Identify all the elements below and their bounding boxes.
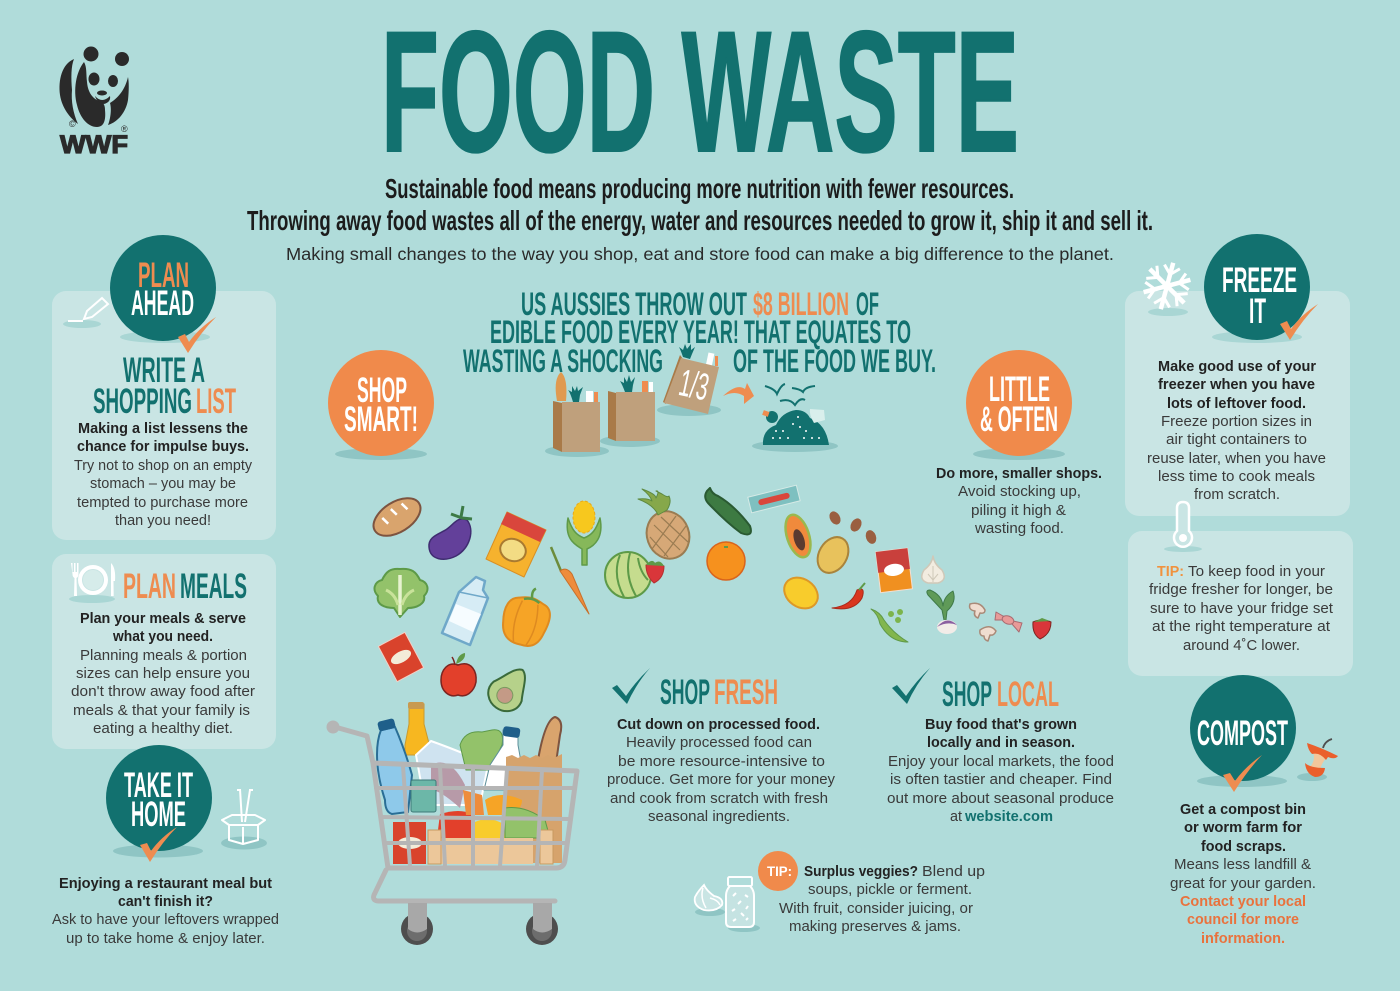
text: little and often <box>936 465 1102 537</box>
section: compost: information. <box>1201 930 1285 947</box>
section: shop local: Buy food that's grown <box>925 716 1077 733</box>
orange <box>707 542 745 580</box>
tip: surplus veggies: making preserves & jams. <box>789 918 961 935</box>
eggplant <box>429 506 472 559</box>
panel: plan ahead: AHEAD <box>131 284 194 323</box>
panel: plan ahead: Making a list lessens the <box>78 420 248 437</box>
panel: freeze it: Make good use of your <box>1158 358 1316 375</box>
badge: little and often <box>966 350 1072 460</box>
section: shop fresh: seasonal ingredients. <box>648 808 790 825</box>
bag 3: one third: 1/3 <box>675 362 712 409</box>
section: shop fresh: produce. Get more for your money <box>607 771 835 788</box>
section: shop local: out more about seasonal produce <box>887 790 1114 807</box>
section: take it home: can't finish it? <box>118 893 213 910</box>
section: shop local: LOCAL <box>997 675 1059 714</box>
text: little and often: wasting food. <box>974 520 1064 537</box>
potato <box>811 532 855 578</box>
panel: plan meals <box>52 554 276 749</box>
panel: freeze it: IT <box>1249 292 1266 331</box>
section: shop local: is often tastier and cheaper. Find <box>890 771 1112 788</box>
section: shop local <box>887 668 1114 825</box>
tip: surplus veggies: TIP: <box>767 864 792 879</box>
bag 2 <box>608 375 655 441</box>
section: shop fresh: and cook from scratch with fresh <box>610 790 828 807</box>
candy <box>995 612 1022 632</box>
cart contents <box>377 702 562 864</box>
tip: surplus veggies: With fruit, consider juicing, or <box>779 900 973 917</box>
panel: plan ahead: WRITE A <box>123 351 205 390</box>
callout: $8 billion: EDIBLE FOOD EVERY YEAR! THAT EQUATES TO <box>490 314 911 350</box>
icon: pencil <box>63 298 108 328</box>
section: shop local: website.com <box>964 808 1053 825</box>
panel: plan meals: what you need. <box>112 628 213 645</box>
bread <box>367 491 427 543</box>
section: shop fresh: be more resource-intensive to <box>618 753 825 770</box>
section: compost: Means less landfill & <box>1174 856 1311 873</box>
small strawberry <box>1033 618 1051 639</box>
carrot <box>551 547 589 614</box>
garlic <box>922 556 944 583</box>
landfill heap <box>762 384 829 445</box>
section: compost: COMPOST <box>1197 714 1288 753</box>
panel: plan ahead <box>52 235 276 540</box>
papaya <box>781 512 815 560</box>
callout: $8 billion <box>463 286 936 379</box>
chili <box>832 583 865 609</box>
panel: freeze it: lots of leftover food. <box>1167 395 1306 412</box>
panel: freeze it: freezer when you have <box>1158 376 1315 393</box>
tip: surplus veggies <box>695 851 985 935</box>
badge: little and often: & OFTEN <box>980 400 1058 439</box>
panel: freeze it: reuse later, when you have <box>1147 450 1326 467</box>
panel: fridge tip: To keep food in your <box>1188 563 1325 580</box>
wheels <box>401 903 558 945</box>
mushrooms <box>970 603 996 641</box>
subtitle text: Making small changes to the way you shop, eat and store food can make a big difference to the planet. <box>286 244 1114 264</box>
badge: shop smart: SHOP <box>357 371 407 410</box>
panel: plan ahead: tempted to purchase more <box>77 494 248 511</box>
panel: plan ahead: SHOPPING <box>93 382 192 421</box>
section: shop local: at <box>950 808 963 825</box>
illustration: grocery bags to landfill <box>545 344 838 457</box>
subtitle text: Sustainable food means producing more nutrition with fewer resources. <box>385 173 1014 204</box>
icon: teal check <box>892 668 930 704</box>
icon: thermometer <box>1164 502 1202 552</box>
strawberry <box>646 561 664 583</box>
avocado <box>482 660 537 718</box>
panel: freeze it: from scratch. <box>1194 486 1280 503</box>
icon: teal check <box>612 668 650 704</box>
bag 3: one third <box>663 344 719 414</box>
section: take it home: Ask to have your leftovers wrapped <box>52 911 279 928</box>
text: little and often: Do more, smaller shops. <box>936 465 1102 482</box>
cabbage <box>605 552 651 598</box>
red package <box>378 632 424 682</box>
section: compost: council for more <box>1187 911 1299 928</box>
callout: $8 billion: WASTING A SHOCKING <box>463 343 663 379</box>
panel: freeze it: air tight containers to <box>1166 431 1307 448</box>
panel: plan meals: eating a healthy diet. <box>93 720 233 737</box>
section: compost: or worm farm for <box>1184 819 1302 836</box>
icon: takeaway box with chopsticks <box>221 789 267 850</box>
icon: garlic and jar <box>695 877 760 932</box>
panel: plan meals: don't throw away food after <box>71 683 255 700</box>
subtitle text <box>247 173 1153 264</box>
arrow <box>723 383 754 404</box>
callout: $8 billion: US AUSSIES THROW OUT <box>521 286 747 322</box>
section: shop fresh <box>607 668 835 825</box>
section: compost: Contact your local <box>1180 893 1306 910</box>
panel: freeze it <box>1125 234 1350 516</box>
tip: surplus veggies: soups, pickle or ferment. <box>808 881 972 898</box>
panel: plan meals: Planning meals & portion <box>80 647 247 664</box>
milk carton <box>442 577 488 645</box>
panel: plan ahead: LIST <box>196 382 236 421</box>
logo: WWF panda: © <box>69 119 76 129</box>
section: shop fresh: Heavily processed food can <box>626 734 812 751</box>
panel: plan meals: sizes can help ensure you <box>76 665 250 682</box>
callout: $8 billion: $8 BILLION <box>753 286 849 322</box>
panel: fridge tip: sure to have your fridge set <box>1150 600 1334 617</box>
snack bar <box>748 485 800 513</box>
yellow pepper <box>497 582 556 650</box>
panel: fridge tip: fridge fresher for longer, be <box>1149 581 1333 598</box>
panel: fridge tip <box>1128 502 1353 676</box>
cucumber <box>705 488 751 534</box>
lettuce <box>375 569 427 617</box>
section: take it home: TAKE IT <box>124 766 193 805</box>
illustration: shopping cart <box>326 702 577 945</box>
badge: little and often: LITTLE <box>989 370 1050 409</box>
panel: freeze it: FREEZE <box>1222 261 1297 300</box>
icon: plate and cutlery <box>69 563 115 603</box>
apple <box>441 653 476 696</box>
section: take it home: HOME <box>131 795 186 834</box>
logo: WWF panda <box>60 46 129 159</box>
section: take it home: up to take home & enjoy later. <box>66 930 265 947</box>
panel: plan meals: PLAN <box>123 567 176 606</box>
section: compost: food scraps. <box>1201 838 1286 855</box>
panel: plan ahead: Try not to shop on an empty <box>74 457 252 474</box>
panel: fridge tip: around 4˚C lower. <box>1183 637 1300 654</box>
text: little and often: piling it high & <box>971 502 1066 519</box>
logo: WWF panda: WWF <box>60 131 128 159</box>
panel: plan ahead: stomach – you may be <box>90 475 236 492</box>
section: take it home: Enjoying a restaurant meal but <box>59 875 272 892</box>
section: take it home <box>52 745 279 947</box>
panel: plan meals: Plan your meals & serve <box>80 610 246 627</box>
panel: plan ahead: PLAN <box>138 256 189 295</box>
tip: surplus veggies: Blend up <box>922 863 985 880</box>
panel: freeze it: less time to cook meals <box>1158 468 1315 485</box>
panel: plan meals: MEALS <box>180 567 247 606</box>
logo: WWF panda: ® <box>121 124 128 134</box>
text: little and often: Avoid stocking up, <box>958 483 1081 500</box>
section: shop local: SHOP <box>942 675 992 714</box>
tip: surplus veggies: Surplus veggies? <box>804 863 918 880</box>
section: shop fresh: FRESH <box>714 673 778 712</box>
cereal box <box>486 512 546 577</box>
section: compost: Get a compost bin <box>1180 801 1306 818</box>
callout: $8 billion: OF THE FOOD WE BUY. <box>733 343 936 379</box>
badge: shop smart: SMART! <box>344 400 418 439</box>
beans <box>827 509 878 545</box>
panel: plan meals: meals & that your family is <box>73 702 250 719</box>
cart frame <box>335 727 577 901</box>
panel: fridge tip: TIP: <box>1157 563 1184 580</box>
section: compost: great for your garden. <box>1170 875 1316 892</box>
panel: freeze it: Freeze portion sizes in <box>1161 413 1312 430</box>
panel: fridge tip: at the right temperature at <box>1152 618 1331 635</box>
section: compost <box>1170 675 1338 947</box>
icon: snowflake <box>1140 257 1194 316</box>
illustration: falling food items <box>367 485 1051 718</box>
turnip <box>927 590 957 634</box>
callout: $8 billion: OF <box>856 286 879 322</box>
soup packet <box>876 548 912 593</box>
section: shop local: Enjoy your local markets, the food <box>888 753 1114 770</box>
corn <box>567 501 601 565</box>
section: shop fresh: SHOP <box>660 673 710 712</box>
pineapple <box>638 489 696 565</box>
section: shop local: locally and in season. <box>927 734 1075 751</box>
icon: apple core <box>1297 739 1338 781</box>
bag 1 <box>553 372 600 452</box>
lemon <box>778 571 824 615</box>
section: shop fresh: Cut down on processed food. <box>617 716 820 733</box>
pea pod <box>871 609 908 642</box>
panel: plan ahead: chance for impulse buys. <box>77 438 249 455</box>
panel: plan ahead: than you need! <box>115 512 211 529</box>
badge: shop smart <box>328 350 434 460</box>
